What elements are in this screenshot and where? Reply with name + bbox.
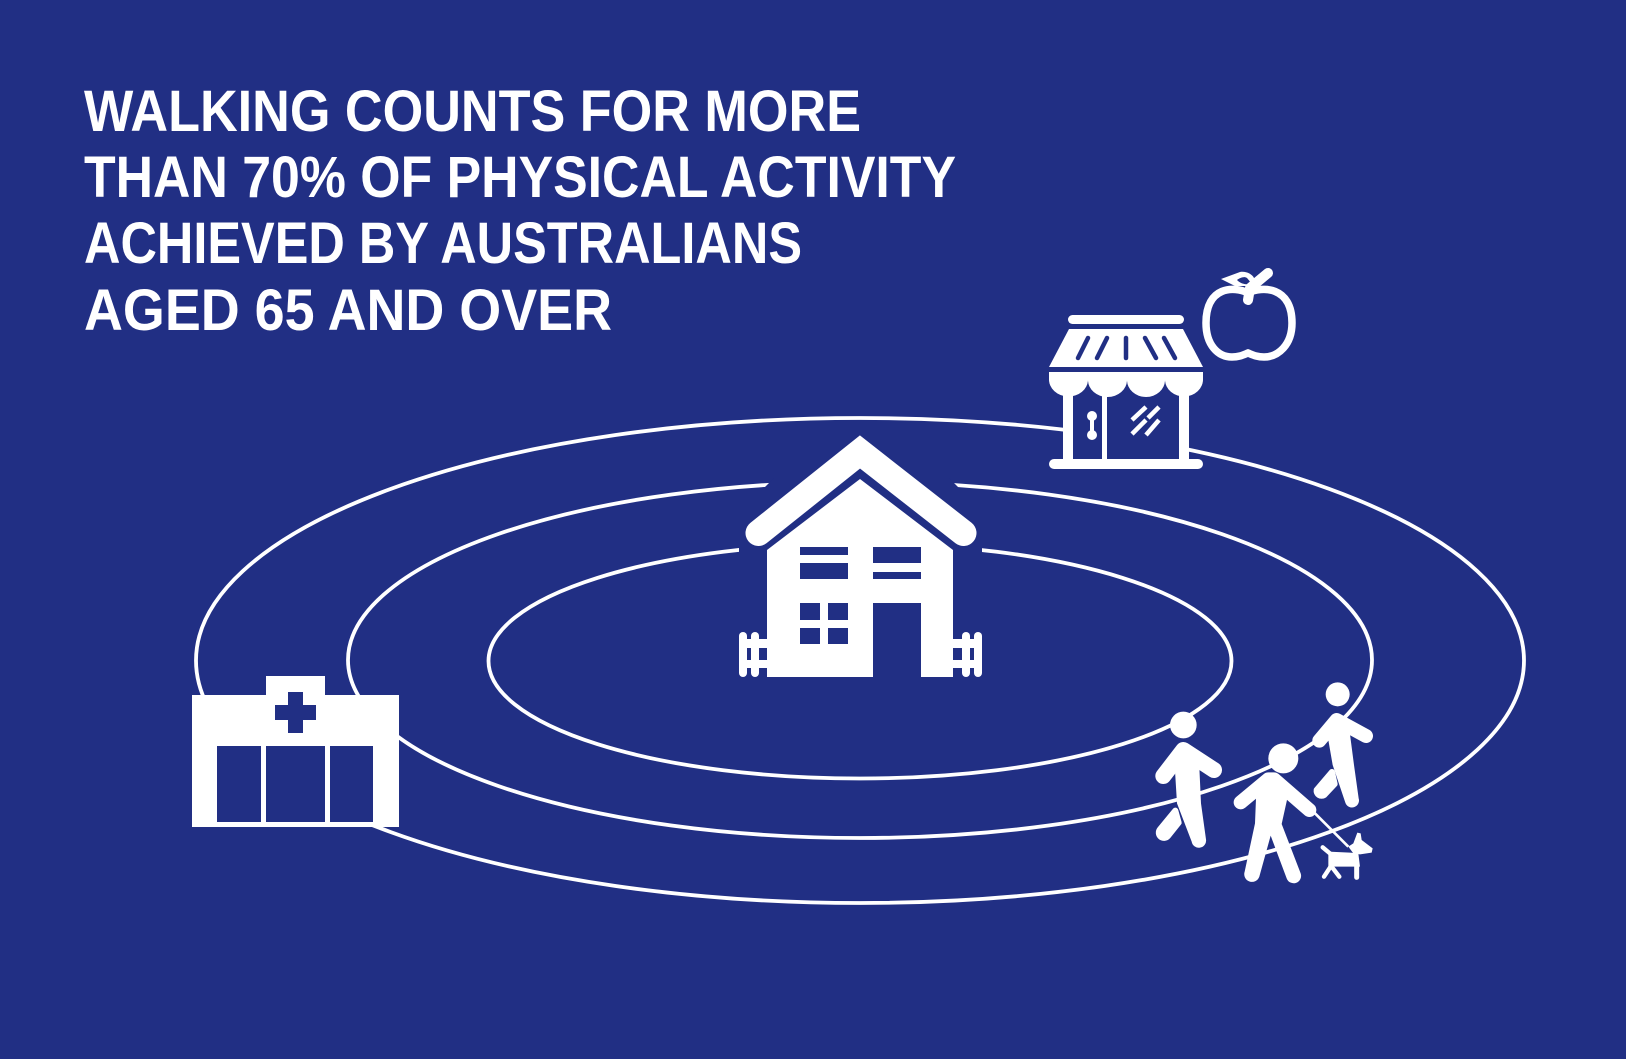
icon: apple [1206, 272, 1292, 357]
title: WALKING COUNTS FOR MORE [84, 79, 861, 144]
title: THAN 70% OF PHYSICAL ACTIVITY [84, 145, 956, 210]
house ring gaps [739, 478, 982, 556]
icon: walking person right [1317, 682, 1366, 808]
icon: walking person left [1159, 712, 1214, 848]
icon: walking person with dog [1241, 743, 1348, 883]
icon: dog [1323, 833, 1373, 877]
title: AGED 65 AND OVER [84, 278, 612, 343]
icon: house [739, 452, 982, 677]
icon: shop [1049, 315, 1203, 469]
title [84, 79, 956, 343]
concentric walking-distance rings [196, 418, 1524, 903]
title: ACHIEVED BY AUSTRALIANS [84, 211, 802, 276]
icon: hospital [192, 676, 399, 827]
